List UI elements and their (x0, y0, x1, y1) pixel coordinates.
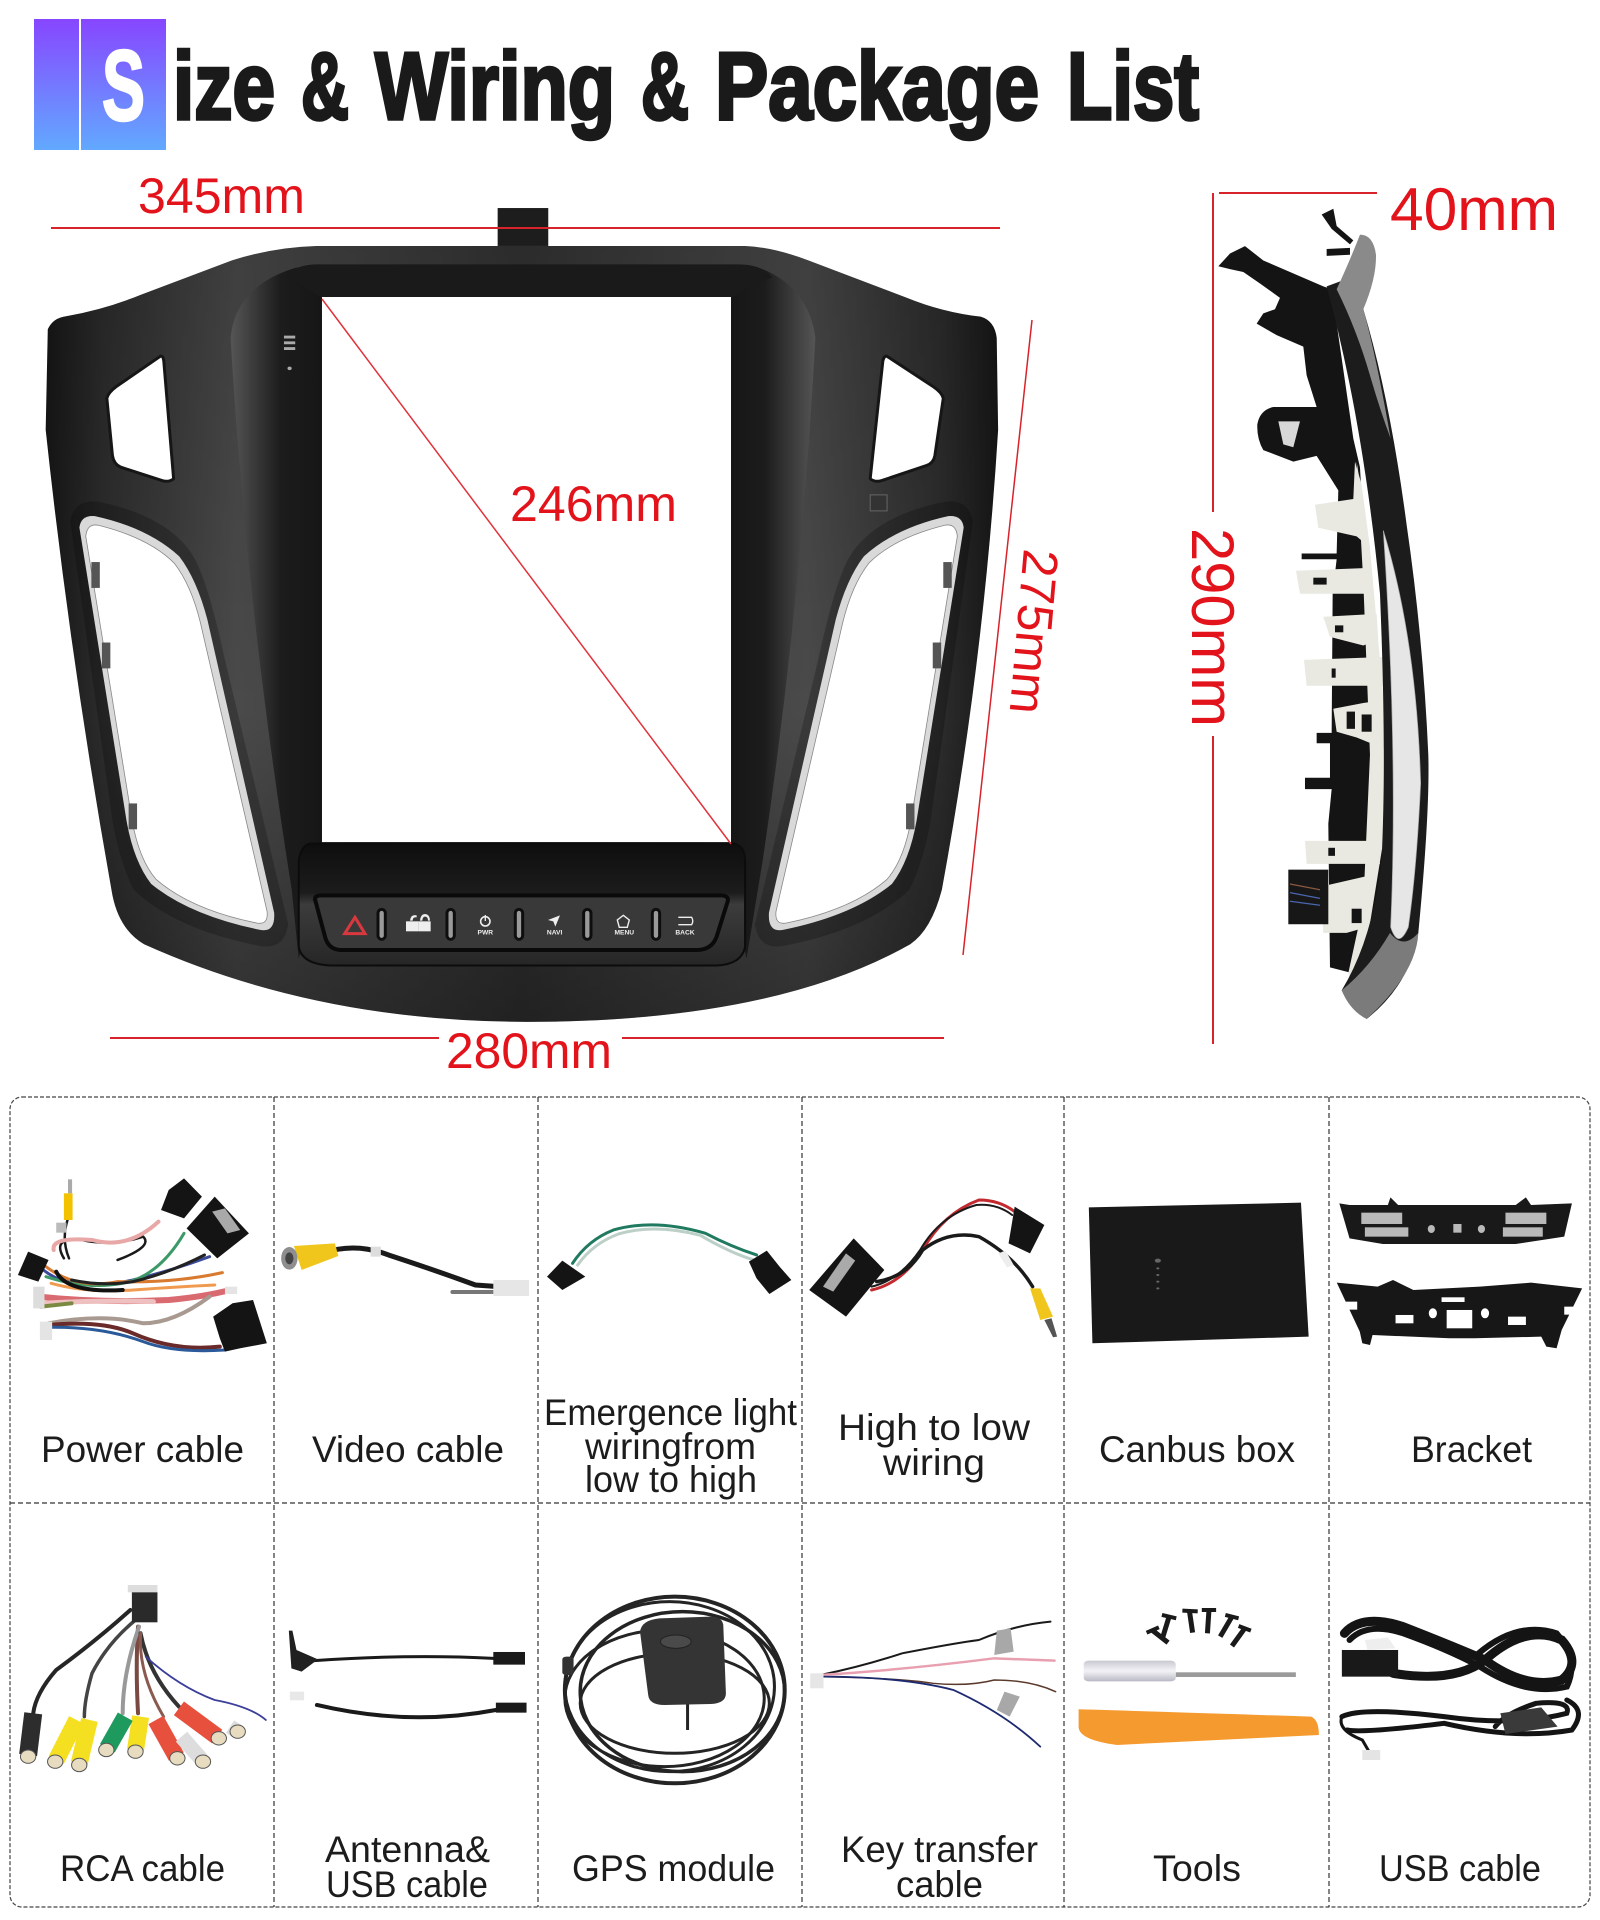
icon: power with PWR label: PWR (478, 930, 493, 937)
label (838, 1407, 1030, 1483)
left upper vent (107, 356, 174, 481)
label: low to high (585, 1459, 757, 1500)
title text: List (1067, 33, 1199, 140)
label: Bracket (1411, 1429, 1533, 1470)
label (325, 1829, 490, 1905)
icon: power with PWR label (478, 915, 493, 937)
dimension: 246mm diagonal (322, 299, 731, 844)
item: GPS module (562, 1597, 785, 1783)
screen area (322, 297, 731, 842)
title text: & (641, 33, 689, 140)
button recess (299, 844, 745, 966)
item: canbus box (1089, 1203, 1309, 1343)
screwdriver (1084, 1661, 1296, 1681)
item: USB cable (1341, 1621, 1578, 1760)
title accent block with letter S (34, 19, 166, 150)
title text: Wiring (375, 33, 615, 140)
small square mark (870, 495, 887, 511)
left lower vent (70, 501, 288, 947)
item: key transfer cable (810, 1622, 1056, 1747)
icon: hazard triangle (345, 917, 365, 934)
centre bezel (231, 264, 815, 959)
top clip tab (498, 208, 548, 246)
icon: back with BACK label (675, 917, 695, 937)
item: power cable (18, 1178, 267, 1352)
icon: lock (406, 914, 431, 931)
icon: navigation with NAVI label (547, 915, 562, 937)
button separators (378, 909, 660, 939)
icon: navigation with NAVI label: NAVI (547, 930, 562, 937)
label: USB cable (1379, 1848, 1541, 1889)
label: cable (896, 1864, 983, 1905)
label (544, 1392, 798, 1500)
dimension: 275mm (963, 320, 1069, 955)
title (34, 19, 1199, 150)
icon: home with MENU label (614, 915, 634, 937)
label: High to low (838, 1407, 1030, 1448)
indicator marks (284, 336, 295, 370)
label: RCA cable (60, 1848, 225, 1889)
dimension: 40mm: 40mm (1390, 176, 1558, 243)
label: Power cable (41, 1429, 244, 1470)
label: Emergence light (544, 1392, 798, 1433)
label: GPS module (572, 1848, 775, 1889)
dimension: 290mm: 290mm (1179, 528, 1246, 727)
label: Canbus box (1099, 1429, 1295, 1470)
label: Antenna& (325, 1829, 490, 1870)
panel: package list grid (10, 1097, 1590, 1907)
connector with wires (1288, 870, 1328, 924)
dimension: 345mm: 345mm (138, 168, 305, 224)
black rear bracket (1218, 246, 1383, 976)
dimension: 275mm: 275mm (999, 547, 1069, 716)
label: wiringfrom (584, 1426, 756, 1467)
pry tool (1079, 1709, 1319, 1745)
title text: & (301, 33, 349, 140)
button strip (315, 895, 728, 950)
item: brackets (1337, 1197, 1582, 1348)
right lower vent (755, 501, 973, 947)
white clips (1296, 462, 1385, 985)
frame body (46, 246, 998, 1022)
icon: home with MENU label: MENU (614, 930, 634, 937)
item: emergence light wiring (547, 1225, 791, 1294)
label: Video cable (312, 1429, 504, 1470)
right upper vent (870, 356, 943, 481)
clip slots (1313, 578, 1372, 923)
curved outer shell (1327, 235, 1429, 1019)
item: high to low wiring (809, 1200, 1057, 1337)
title text (173, 33, 1199, 140)
panel: side view of frame (1218, 209, 1429, 1019)
item: RCA cable (20, 1585, 266, 1772)
screws (1147, 1610, 1251, 1646)
title accent block with letter S: S (102, 30, 145, 142)
title text: ize (173, 33, 275, 140)
label: wiring (882, 1442, 985, 1483)
panel: front view of dash frame (46, 208, 998, 1022)
item: video cable (281, 1243, 529, 1296)
dimension: 280mm: 280mm (446, 1023, 612, 1079)
label: USB cable (326, 1864, 488, 1905)
title text: Package (715, 33, 1039, 140)
icon: back with BACK label: BACK (675, 930, 695, 937)
label: Tools (1153, 1848, 1241, 1889)
item: tools (1079, 1610, 1319, 1745)
dimension: 246mm diagonal: 246mm (510, 476, 677, 532)
item: antenna and USB cable (289, 1631, 527, 1717)
label: Key transfer (841, 1829, 1038, 1870)
label (841, 1829, 1038, 1905)
